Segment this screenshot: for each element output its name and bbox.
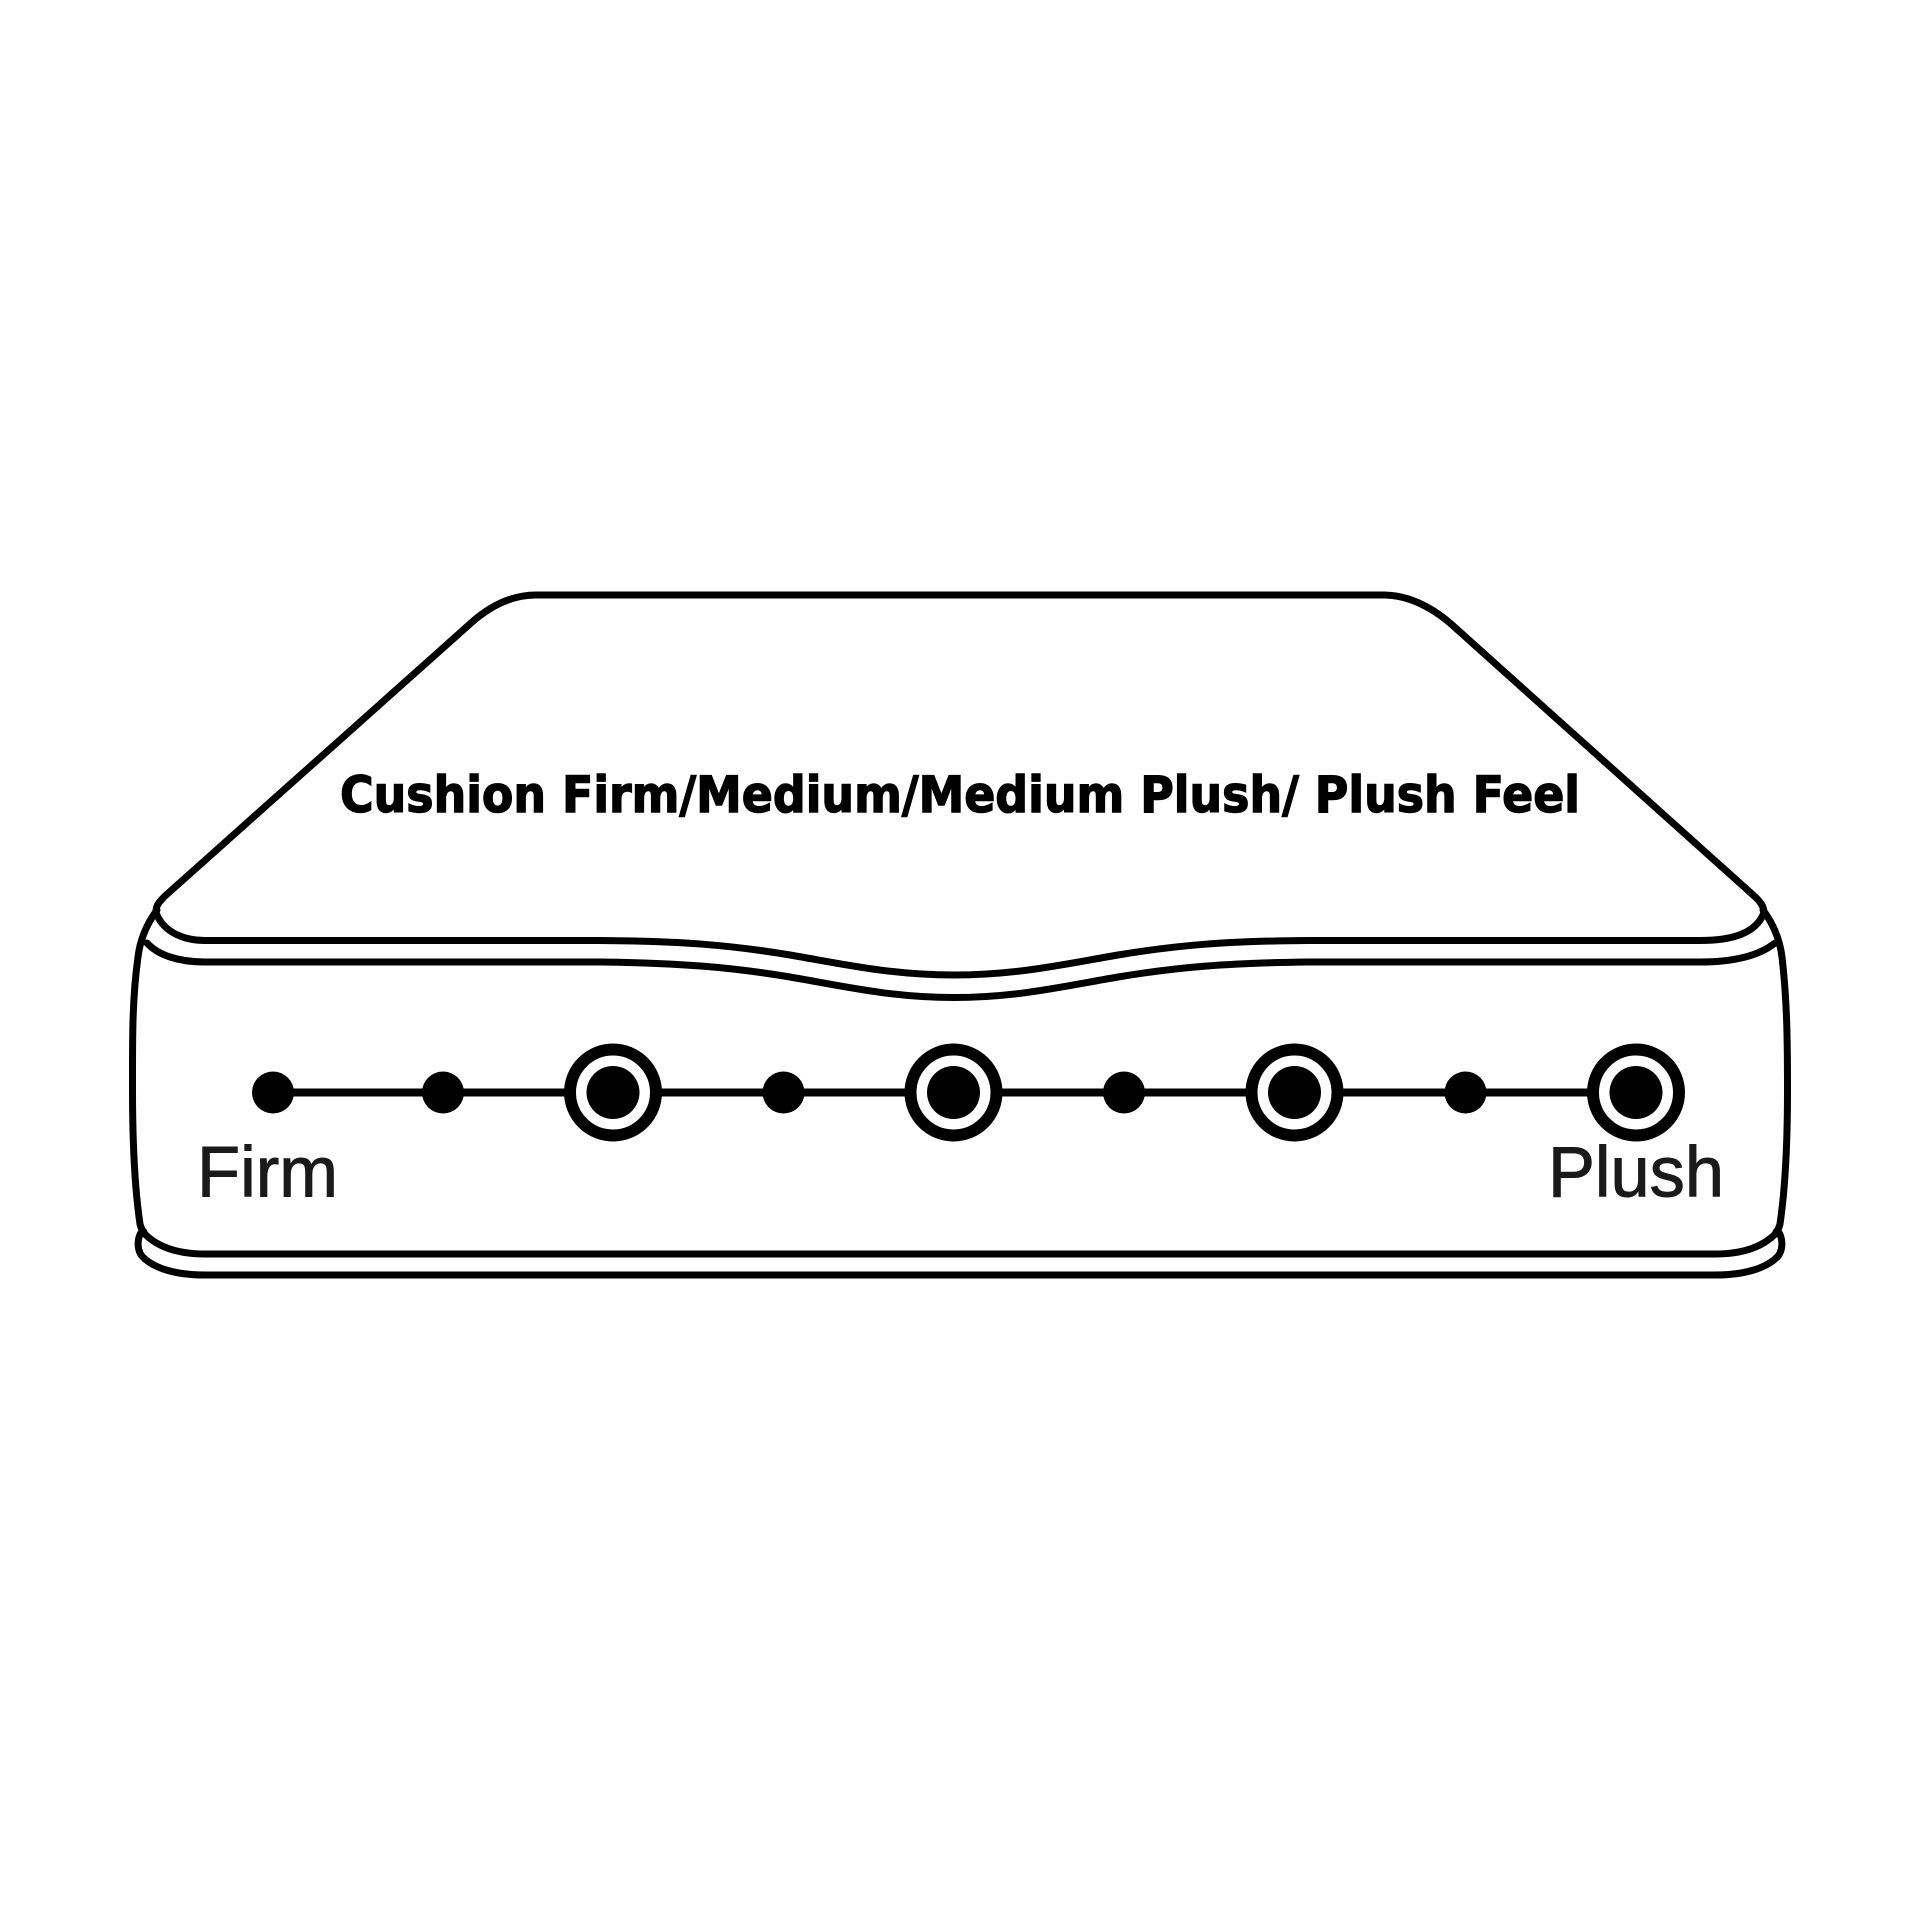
marker: ring point 5: [910, 1050, 996, 1136]
marker: ring point 3: [570, 1050, 656, 1136]
mattress left side: [132, 910, 157, 1232]
marker: point 2: [422, 1072, 464, 1114]
mattress right side: [1763, 910, 1788, 1232]
scale line: [273, 1088, 1636, 1096]
marker: point 6: [1103, 1072, 1145, 1114]
marker: point 4: [762, 1072, 804, 1114]
mattress outline: [132, 595, 1788, 1275]
heading: cushion feel: Cushion Firm/Medium/Medium Plush/ Plush Feel: [340, 766, 1580, 824]
mattress bottom piping: [138, 1231, 1782, 1275]
label: Firm: Firm: [197, 1134, 338, 1212]
mattress top piping: [147, 943, 1775, 998]
marker: ring point 7: [1252, 1050, 1338, 1136]
firmness scale: [252, 1050, 1679, 1136]
mattress top surface: [156, 595, 1764, 975]
label: Plush: Plush: [1548, 1134, 1724, 1212]
marker: point 1: [252, 1072, 294, 1114]
marker: ring point 9: [1593, 1050, 1679, 1136]
marker: point 8: [1444, 1072, 1486, 1114]
